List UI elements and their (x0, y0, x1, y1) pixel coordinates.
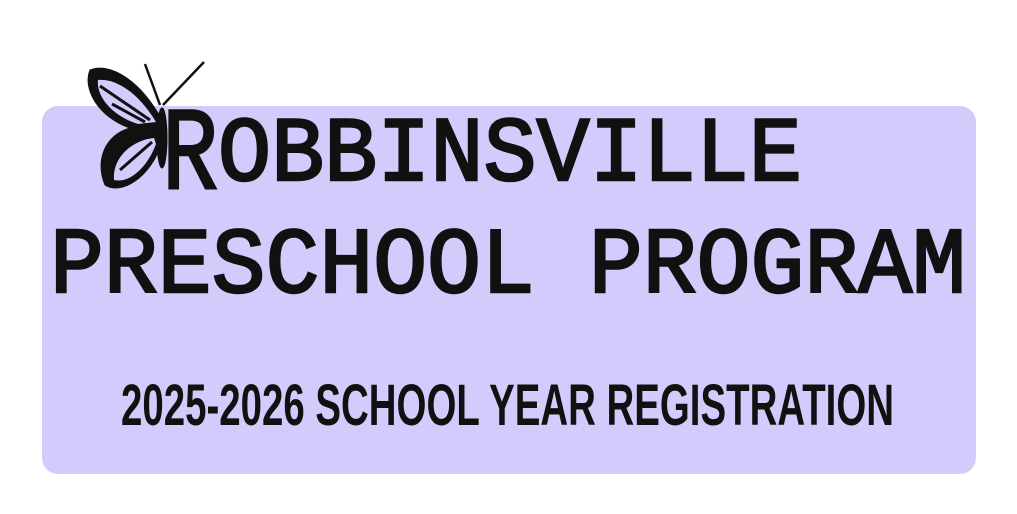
icon: butterfly (88, 62, 204, 188)
heading: Robbinsville: OBBINSVILLE (218, 103, 802, 208)
heading: Preschool Program: PRESCHOOL PROGRAM (50, 215, 966, 321)
heading: Robbinsville: R (162, 91, 218, 224)
panel: lavender banner (42, 106, 976, 474)
